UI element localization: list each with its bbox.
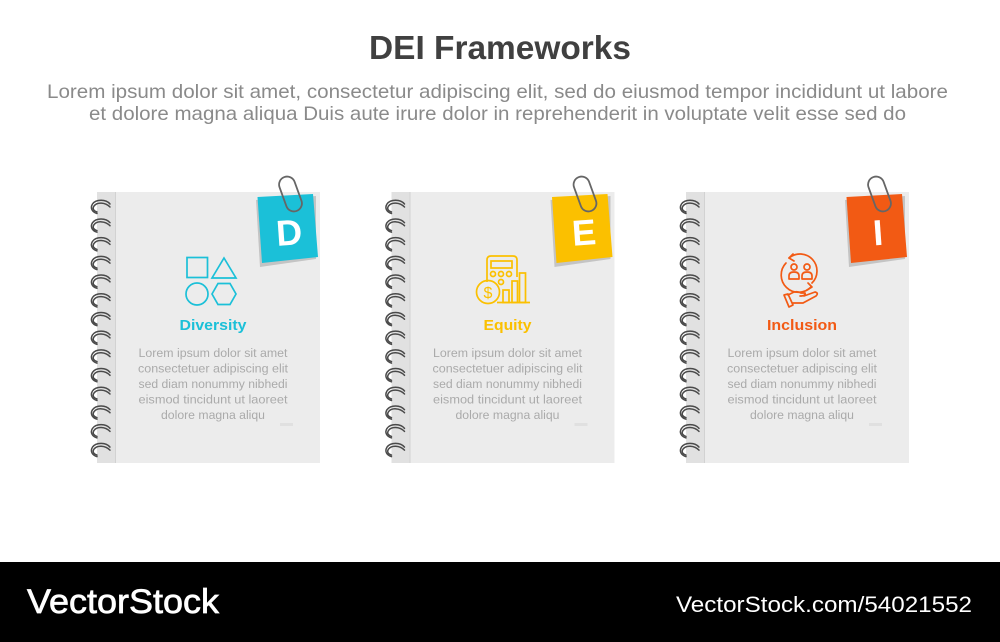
paperclip <box>571 174 599 214</box>
sticky note D <box>256 194 318 267</box>
subtitle text: Lorem ipsum dolor sit amet, consectetur adipiscing elit, sed do eiusmod tempor incididunt ut labore <box>47 81 948 103</box>
body text: Equity: Lorem ipsum dolor sit amet <box>433 346 583 360</box>
body text: Equity: sed diam nonummy nibhedi <box>433 377 582 391</box>
sticky note I <box>845 194 907 267</box>
paperclip <box>277 174 304 214</box>
sticky note E: E <box>571 211 597 254</box>
panel: equity notebook <box>386 174 614 463</box>
body text: Inclusion <box>727 346 878 422</box>
body text: Inclusion: dolore magna aliqu <box>750 408 854 422</box>
icon: dollar sign: $ <box>484 285 493 302</box>
footer banner <box>0 562 1000 642</box>
body text: Diversity <box>138 346 289 422</box>
image id: VectorStock.com/54021552 <box>676 592 972 617</box>
subtitle text: et dolore magna aliqua Duis aute irure dolor in reprehenderit in voluptate velit esse sed do <box>89 103 906 125</box>
body text: Equity: dolore magna aliqu <box>456 408 560 422</box>
subtitle text <box>47 81 948 125</box>
icon: people in cycle on a hand <box>781 254 817 307</box>
sticky note E <box>550 194 612 267</box>
body text: Equity: consectetuer adipiscing elit <box>432 362 583 376</box>
icon: shapes <box>186 258 236 305</box>
sticky note D: D <box>275 211 303 254</box>
body text: Diversity: eismod tincidunt ut laoreet <box>138 392 288 406</box>
body text: Inclusion: eismod tincidunt ut laoreet <box>728 392 877 406</box>
body text: Equity <box>432 346 583 422</box>
panel: inclusion notebook <box>680 174 909 463</box>
body text: Diversity: Lorem ipsum dolor sit amet <box>138 346 288 360</box>
body text: Equity: eismod tincidunt ut laoreet <box>433 392 583 406</box>
body text: Inclusion: consectetuer adipiscing elit <box>727 362 878 376</box>
body text: Diversity: dolore magna aliqu <box>161 408 265 422</box>
title: DEI Frameworks <box>369 29 631 66</box>
body text: Inclusion: sed diam nonummy nibhedi <box>728 377 876 391</box>
body text: Diversity: consectetuer adipiscing elit <box>138 362 289 376</box>
body text: Inclusion: Lorem ipsum dolor sit amet <box>728 346 877 360</box>
paperclip <box>866 174 893 214</box>
body text: Diversity: sed diam nonummy nibhedi <box>138 377 288 391</box>
sticky note I: I <box>872 212 884 253</box>
heading: Inclusion: Inclusion <box>767 317 837 334</box>
panel: diversity notebook <box>91 174 320 463</box>
heading: Equity: Equity <box>484 317 532 334</box>
heading: Diversity: Diversity <box>180 317 247 334</box>
icon: calculator, coin and bars <box>476 256 530 304</box>
logo wordmark: VectorStock <box>27 583 220 621</box>
